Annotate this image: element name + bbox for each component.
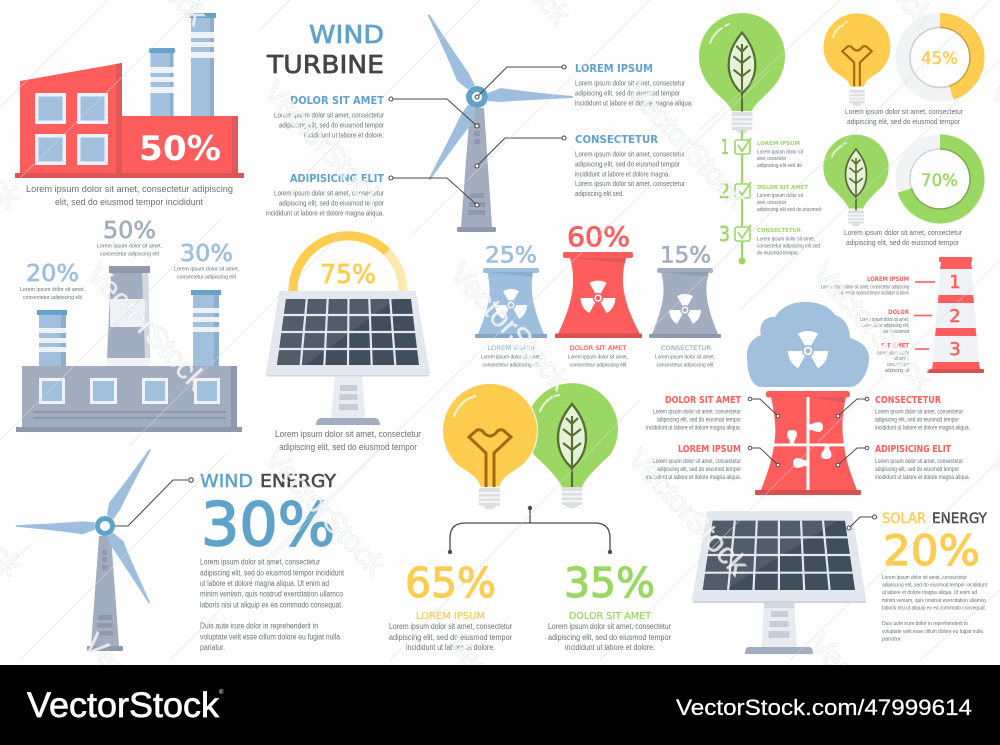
- callout: adipisicing elit: adipiscing elit, sed do eiusmod tempor: [279, 200, 385, 208]
- callout: dolor sit amet: Lorem ipsum dolor sit amet, consectetur: [274, 112, 385, 120]
- donut chart 70 percent: [903, 142, 977, 216]
- cooling tower red 60 percent: 60%: [567, 222, 630, 253]
- solar energy body text: Lorem ipsum dolor sit amet, consectetur: [882, 575, 967, 581]
- step 1: amet, consectetur: [757, 156, 786, 162]
- radioactive cloud: [747, 302, 869, 387]
- callout: consectetur: CONSECTETUR: [575, 134, 658, 146]
- cooling tower blue 25 percent: consectetur adipiscing elit: [482, 362, 540, 368]
- tower label 1: LOREM IPSUM: [867, 276, 909, 283]
- wind energy body text: Lorem ipsum dolor sit amet, consectetur: [200, 558, 320, 566]
- tower label 2: consectetur adipiscing elit,: [862, 323, 909, 329]
- title: wind turbine: TURBINE: [266, 50, 384, 79]
- solar energy body text: voluptate velit esse cillum dolore eu fugiat nulla: [882, 629, 984, 635]
- callout: dolor sit amet: DOLOR SIT AMET: [290, 95, 385, 107]
- puzzle label: consectetur: Lorem ipsum dolor sit amet, consectetur: [875, 408, 964, 416]
- solar panel with 75 percent arc: [268, 236, 428, 425]
- puzzle label: dolor sit amet: Lorem ipsum dolor sit amet, consectetur: [653, 408, 742, 416]
- callout: lorem ipsum: adipiscing elit, sed do eiusmod tempor: [575, 90, 681, 98]
- step 3: CONSECTETUR: [757, 228, 802, 234]
- heading: wind energy 30 percent: WIND: [200, 471, 253, 492]
- step 2: DOLOR SIT AMET: [757, 185, 808, 191]
- stat 50 percent: consectetur adipiscing elit: [100, 252, 159, 258]
- cooling tower grey 15 percent: CONSECTETUR: [661, 344, 711, 352]
- wind energy body text: voluptate velit esse cillum dolore eu fugiat nulla: [200, 632, 341, 642]
- watermark: VectorStock: [806, 257, 940, 398]
- cooling tower blue 25 percent: LOREM IPSUM: [488, 344, 534, 352]
- step 1: 1: [721, 135, 729, 159]
- puzzle label: lorem ipsum: [646, 444, 742, 481]
- watermark: VectorStock: [621, 442, 755, 583]
- step 3: do eiusmod tempor: [757, 250, 798, 256]
- factory with 50 percent: 50%: [139, 129, 221, 169]
- wind energy body text: [200, 558, 345, 652]
- puzzle label: dolor sit amet: [646, 395, 742, 432]
- striped tower: [914, 257, 984, 373]
- factory with 50 percent: [15, 13, 244, 178]
- step 3: consectetur adipiscing elit sed: [757, 244, 820, 250]
- tower label 3: consectetur: [887, 362, 909, 368]
- solar panel with 75 percent arc: 75%: [320, 260, 376, 290]
- title: wind turbine: [266, 20, 384, 79]
- icon: green leaf bulb with steps: [699, 13, 785, 264]
- watermark: VectorStock: [443, 257, 577, 398]
- watermark: VectorStock: [258, 442, 392, 583]
- watermark: VectorStock: [80, 257, 214, 398]
- callout: consectetur: [575, 134, 686, 198]
- puzzle label: adipisicing elit: adipiscing elit, sed do eiusmod tempor: [875, 466, 960, 473]
- caption 70 percent: Lorem ipsum dolor sit amet, consectetur: [844, 228, 962, 237]
- tower label 3: sit amet,: [894, 356, 909, 362]
- step 1: adipiscing elit sed do: [757, 163, 802, 169]
- callout: dolor sit amet: incididunt ut labore et dolore.: [304, 132, 384, 140]
- footer bar: [0, 665, 1000, 745]
- stat 20 percent: consectetur adipiscing elit: [23, 295, 82, 301]
- footer bar: ®: [219, 689, 224, 696]
- wind energy body text: minim veniam, quis nostrud exercitation ullamco: [200, 590, 344, 598]
- solar energy body text: pariatur.: [882, 637, 902, 643]
- wind energy body text: ut labore et dolore magna aliqua. Ut enim ad: [200, 579, 329, 588]
- puzzle label: consectetur: incididunt ut labore et dolore magna aliqua.: [875, 424, 970, 432]
- callout: consectetur: incididunt ut labore et dolore magna.: [575, 172, 670, 178]
- heading: solar energy 20 percent: 20%: [883, 526, 980, 575]
- tower label 2: [860, 309, 909, 335]
- stat 50 percent: [97, 218, 162, 258]
- stat 35 percent: incididunt ut labore et dolore.: [565, 643, 655, 652]
- stat 30 percent: consectetur adipiscing elit: [177, 274, 236, 280]
- step 2: Lorem ipsum dolor sit: [757, 193, 803, 199]
- step 2: [719, 179, 821, 213]
- callout: adipisicing elit: incididunt ut labore et dolore magna aliqua.: [266, 210, 384, 218]
- stat 30 percent: [174, 241, 239, 280]
- cooling tower blue 25 percent: Lorem ipsum dolor sit amet,: [481, 354, 541, 360]
- callout: consectetur: adipiscing elit sed.: [575, 191, 624, 198]
- callout: adipisicing elit: ADIPISICING ELIT: [290, 173, 385, 185]
- stat 30 percent: 30%: [180, 241, 233, 267]
- cooling tower blue 25 percent: [475, 244, 547, 368]
- heading: solar energy 20 percent: [882, 511, 987, 575]
- stat 35 percent: [548, 559, 671, 652]
- watermark: VectorStock: [620, 75, 754, 216]
- solar panel caption: [275, 429, 421, 452]
- factory caption: elit, sed do eiusmod tempor incididunt: [55, 197, 203, 207]
- stat 65 percent: incididunt ut labore et dolore.: [406, 643, 495, 652]
- puzzle label: consectetur: [875, 395, 970, 432]
- cooling tower red 60 percent: [555, 222, 642, 368]
- puzzle label: adipisicing elit: incididunt ut labore et dolore magna aliqua.: [875, 474, 970, 481]
- stat 20 percent: 20%: [26, 261, 79, 287]
- cooling tower red 60 percent: consectetur adipiscing elit: [570, 362, 627, 368]
- cooling tower blue 25 percent: 25%: [485, 244, 537, 268]
- caption 45 percent: [845, 107, 963, 126]
- stat 65 percent: LOREM IPSUM: [416, 611, 485, 622]
- stat 20 percent: [20, 261, 85, 301]
- donut chart 45 percent: [903, 20, 977, 94]
- solar panel large: [694, 513, 876, 654]
- stat 30 percent: Lorem ipsum dolor sit amet,: [174, 266, 239, 272]
- callout: dolor sit amet: adipiscing elit, sed do eiusmod tempor: [279, 122, 385, 130]
- solar energy body text: [882, 575, 987, 643]
- icon: yellow bulb small: [824, 13, 890, 106]
- tower label 2: sed do eiusmod: [882, 329, 909, 335]
- stat 65 percent: 65%: [405, 559, 496, 607]
- cooling tower red 60 percent: Lorem ipsum dolor sit amet,: [568, 354, 628, 360]
- callout: adipisicing elit: Lorem ipsum dolor sit amet, consectetur: [274, 190, 385, 198]
- caption 45 percent: Lorem ipsum dolor sit amet, consectetur: [845, 107, 963, 116]
- callout: dolor sit amet: [274, 95, 385, 140]
- puzzle label: adipisicing elit: Lorem ipsum dolor sit amet, consectetur: [875, 458, 964, 465]
- stat 20 percent: Lorem ipsum dolor sit amet,: [20, 287, 85, 293]
- callout: lorem ipsum: LOREM IPSUM: [575, 63, 653, 75]
- step 2: 2: [719, 179, 730, 203]
- striped tower: 2: [949, 306, 961, 327]
- puzzle label: lorem ipsum: adipiscing elit, sed do eiusmod tempor: [657, 466, 742, 473]
- footer bar: VectorStock.com/47999614: [676, 695, 972, 720]
- puzzle label: consectetur: CONSECTETUR: [875, 395, 942, 406]
- donut chart 45 percent: 45%: [921, 49, 958, 69]
- step 1: [721, 135, 803, 169]
- step 2: amet, consectetur: [757, 200, 786, 206]
- wind energy body text: adipiscing elit, sed do eiusmod tempor incididunt: [200, 568, 345, 578]
- cooling tower grey 15 percent: Lorem ipsum dolor sit amet,: [655, 354, 715, 360]
- tower label 3: SIT AMET: [881, 342, 910, 350]
- step 3: 3: [719, 222, 730, 246]
- puzzle label: lorem ipsum: Lorem ipsum dolor sit amet, consectetur: [653, 458, 742, 465]
- bracket connector: [448, 506, 612, 554]
- watermark: VectorStock: [257, 75, 391, 216]
- tower label 2: DOLOR: [888, 309, 909, 316]
- wind turbine diagram: [389, 12, 573, 232]
- cooling tower grey 15 percent: [649, 244, 721, 368]
- puzzle cooling tower: [748, 391, 869, 495]
- puzzle label: dolor sit amet: incididunt ut labore et dolore magna aliqua.: [646, 424, 741, 432]
- tower label 3: [877, 342, 910, 374]
- striped tower: 1: [949, 272, 961, 293]
- step 1: Lorem ipsum dolor sit: [757, 150, 803, 156]
- caption 70 percent: adipiscing elit, sed do eiusmod tempor: [846, 238, 959, 247]
- title: wind turbine: WIND: [309, 20, 384, 49]
- wind energy body text: Duis aute irure dolor in reprehenderit in: [200, 622, 318, 630]
- tower label 1: Lorem ipsum dolor sit amet, consectetur adipiscing: [821, 284, 909, 290]
- striped tower: 3: [949, 339, 961, 360]
- tower label 1: [821, 276, 909, 296]
- puzzle label: consectetur: adipiscing elit, sed do eiusmod tempor: [875, 416, 960, 424]
- stat 35 percent: DOLOR SIT AMET: [569, 611, 651, 622]
- cooling tower grey 15 percent: 15%: [660, 244, 711, 268]
- wind turbine large blue: [16, 445, 193, 651]
- solar energy body text: ut labore et dolore magna aliqua. Ut enim ad: [882, 590, 977, 596]
- puzzle label: lorem ipsum: incididunt ut labore et dolore magna aliqua.: [646, 474, 741, 481]
- heading: solar energy 20 percent: ENERGY: [932, 511, 987, 527]
- stat 35 percent: adipiscing elit, sed do eiusmod tempor: [548, 633, 671, 642]
- tower label 2: Lorem ipsum dolor sit amet,: [860, 317, 909, 323]
- step 3: Lorem ipsum dolor sit amet,: [757, 236, 815, 242]
- icon: green bulb small: [823, 135, 889, 226]
- stat 50 percent: 50%: [103, 218, 156, 244]
- tower label 1: elit, sed do eiusmod tempor incididunt ut labore: [839, 290, 909, 296]
- step 3: [719, 222, 820, 256]
- stat 65 percent: Lorem ipsum dolor sit amet, consectetur: [389, 622, 512, 631]
- step 2: adipiscing elit sed do eiusmod: [757, 207, 821, 213]
- wind energy body text: laboris nisi ut aliquip ex ea commodo consequat.: [200, 600, 343, 610]
- donut chart 70 percent: 70%: [921, 171, 958, 191]
- wind energy body text: pariatur.: [200, 643, 225, 652]
- tower label 3: Lorem ipsum dolor: [877, 350, 909, 356]
- tower label 3: adipiscing elit: [885, 368, 909, 374]
- solar panel caption: adipiscing elit, sed do eiusmod tempor: [279, 442, 417, 452]
- caption 45 percent: adipiscing elit, sed do eiusmod tempor: [847, 117, 960, 126]
- callout: consectetur: Lorem ipsum dolor sit amet, consectetur: [575, 152, 686, 158]
- stat 65 percent: adipiscing elit, sed do eiusmod tempor: [389, 633, 512, 642]
- callout: lorem ipsum: Lorem ipsum dolor sit amet, consectetur: [575, 80, 686, 88]
- cooling tower red 60 percent: DOLOR SIT AMET: [570, 344, 627, 352]
- stat 50 percent: Lorem ipsum dolor sit amet,: [97, 244, 162, 250]
- heading: wind energy 30 percent: 30%: [201, 490, 335, 560]
- solar panel caption: Lorem ipsum dolor sit amet, consectetur: [275, 429, 421, 439]
- icon: twin bulbs yellow and green: [442, 383, 618, 510]
- callout: lorem ipsum: [575, 63, 693, 108]
- callout: lorem ipsum: incididunt ut labore et dolore magna aliqua.: [575, 100, 693, 108]
- puzzle label: adipisicing elit: [875, 444, 970, 481]
- stat 35 percent: 35%: [564, 559, 655, 607]
- factory with three percentages: [16, 266, 242, 432]
- stat 35 percent: Lorem ipsum dolor sit amet, consectetur: [548, 622, 671, 631]
- callout: consectetur: adipiscing elit, sed do eiusmod tempor: [575, 162, 681, 168]
- puzzle label: dolor sit amet: adipiscing elit, sed do eiusmod tempor: [657, 416, 742, 424]
- callout: adipisicing elit: [266, 173, 385, 218]
- solar energy body text: Duis aute irure dolor in reprehenderit in: [882, 621, 968, 627]
- heading: wind energy 30 percent: ENERGY: [260, 471, 337, 492]
- callout: consectetur: Lorem ipsum dolor sit amet, consectetur: [575, 181, 686, 188]
- puzzle label: lorem ipsum: LOREM IPSUM: [678, 444, 741, 455]
- puzzle label: adipisicing elit: ADIPISICING ELIT: [875, 444, 951, 455]
- footer bar: VectorStock: [27, 686, 220, 725]
- factory caption: Lorem ipsum dolor sit amet, consectetur adipiscing: [26, 184, 233, 194]
- heading: solar energy 20 percent: SOLAR: [882, 511, 926, 527]
- caption 70 percent: [844, 228, 962, 247]
- cooling tower grey 15 percent: consectetur adipiscing elit: [656, 362, 714, 368]
- step 1: LOREM IPSUM: [757, 141, 800, 147]
- stat 65 percent: [389, 559, 512, 652]
- factory caption: [26, 184, 233, 207]
- puzzle label: dolor sit amet: DOLOR SIT AMET: [665, 395, 741, 406]
